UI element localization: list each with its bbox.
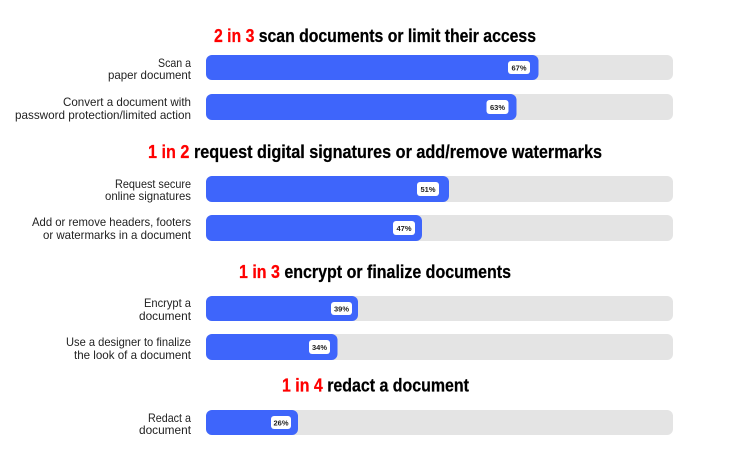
row: use a designer: 34% <box>312 343 327 352</box>
heading: 2 in 3: 2 in 3 scan documents or limit their access <box>214 25 536 46</box>
row: encrypt a document: 39% <box>334 304 349 314</box>
label: paper document <box>108 68 192 82</box>
row: use a designer <box>66 334 673 362</box>
row: request secure online signatures: 51% <box>420 185 436 194</box>
label <box>139 411 192 437</box>
label: password protection/limited action <box>15 108 191 122</box>
label: Use a designer to finalize <box>66 335 191 349</box>
label: the look of a document <box>74 348 192 362</box>
row: request secure online signatures <box>105 176 673 203</box>
label <box>108 56 192 82</box>
row: scan a paper document: 67% <box>511 64 527 72</box>
row: headers footers watermarks <box>32 215 673 242</box>
label: Scan a <box>158 56 191 70</box>
heading: 1 in 2: 1 in 2 request digital signatures or add/remove watermarks <box>148 141 602 162</box>
label: document <box>139 309 192 323</box>
label: Encrypt a <box>144 296 191 310</box>
label: document <box>139 423 192 437</box>
label <box>139 296 192 323</box>
label: Request secure <box>115 177 191 191</box>
row: redact a document <box>139 410 673 437</box>
label <box>66 335 192 362</box>
heading: 1 in 3: 1 in 3 encrypt or finalize documents <box>239 261 511 282</box>
label: or watermarks in a document <box>43 228 192 242</box>
label: Redact a <box>148 411 191 425</box>
label <box>15 95 191 122</box>
heading: 1 in 4: 1 in 4 redact a document <box>282 374 469 396</box>
row: convert a document: 63% <box>490 103 505 112</box>
row: encrypt a document <box>139 296 673 323</box>
label <box>32 215 192 242</box>
label: Add or remove headers, footers <box>32 215 191 229</box>
label: online signatures <box>105 189 191 203</box>
label: Convert a document with <box>63 95 191 109</box>
row: headers footers watermarks: 47% <box>396 224 412 233</box>
row: scan a paper document <box>108 55 673 82</box>
row: convert a document <box>15 94 673 122</box>
row: redact a document: 26% <box>273 418 289 428</box>
label <box>105 177 191 203</box>
